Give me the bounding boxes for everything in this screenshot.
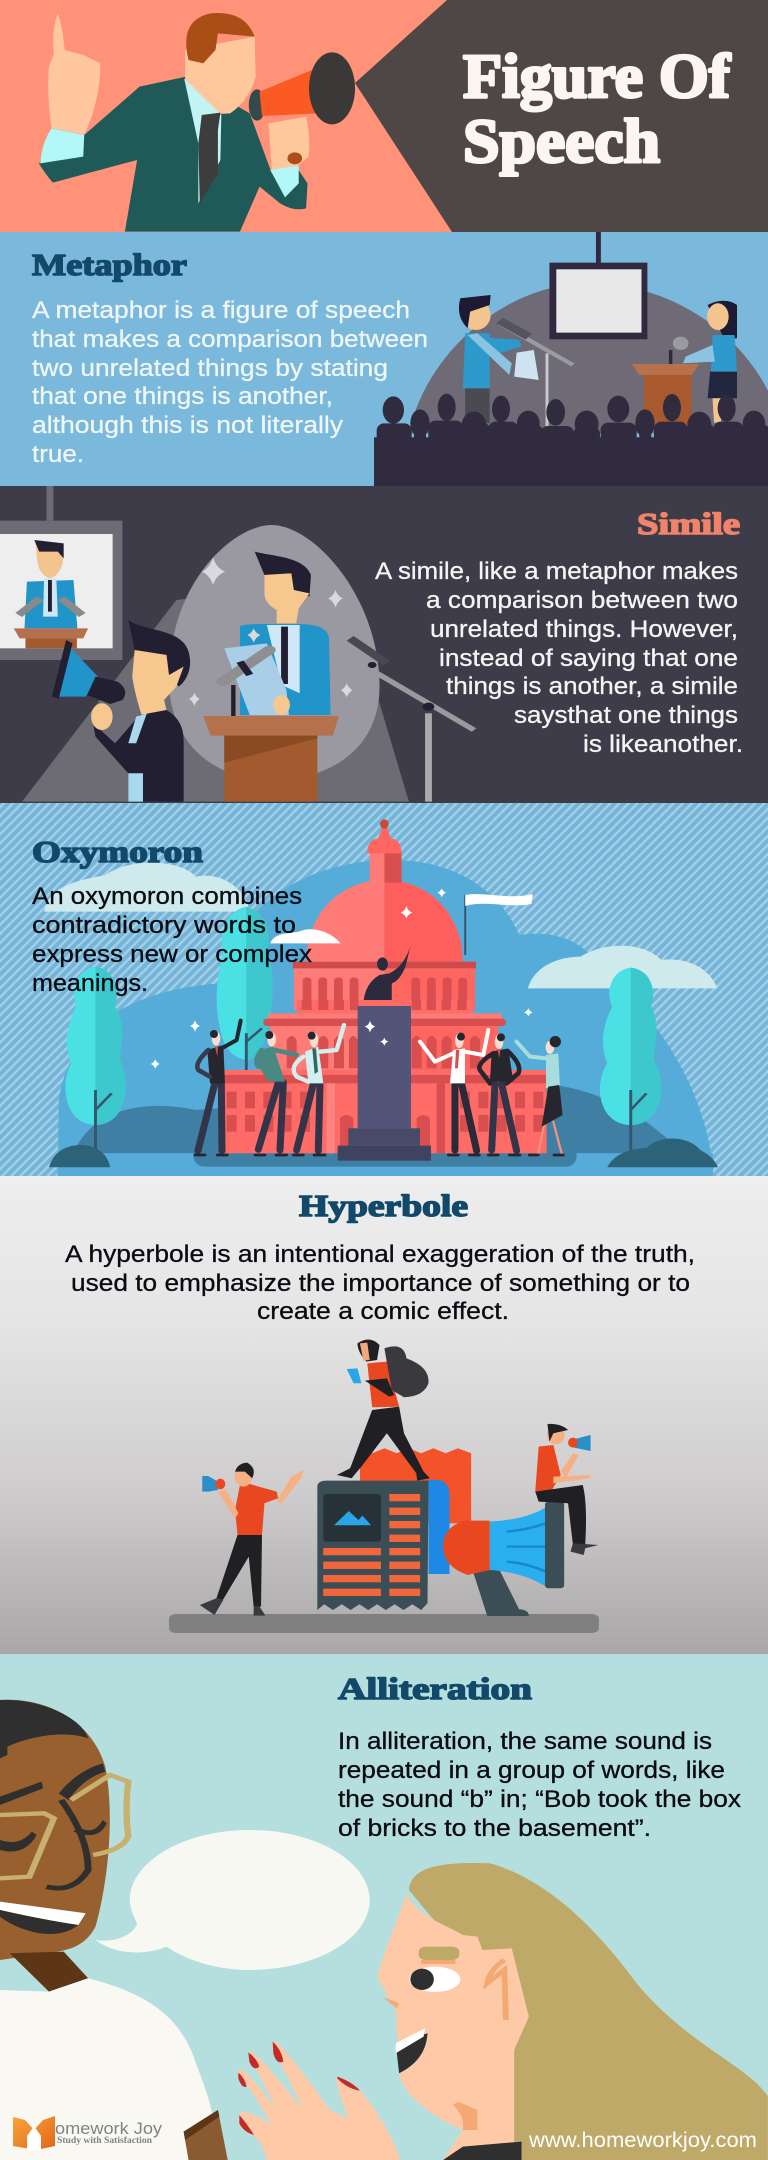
text: simile definition: things is another, a simile [446, 673, 738, 700]
text: metaphor definition: that one things is another, [32, 383, 333, 410]
panel: hyperbole [0, 1176, 768, 1654]
heading: Oxymoron: Oxymoron [32, 834, 203, 869]
text: metaphor definition [32, 297, 428, 468]
text: alliteration definition [338, 1728, 741, 1842]
illustration: conference stage [409, 232, 768, 433]
text: simile definition: unrelated things. However, [430, 616, 738, 643]
text: alliteration definition: repeated in a group of words, like [338, 1757, 725, 1784]
heading: Simile: Simile [637, 506, 740, 541]
logo: Homework Joy: omework Joy [55, 2119, 163, 2138]
text: hyperbole definition: create a comic effect. [257, 1298, 509, 1325]
audience silhouettes [374, 394, 768, 487]
panel: simile [0, 486, 768, 803]
person 3 [294, 1025, 344, 1151]
heading: Hyperbole: Hyperbole [299, 1188, 468, 1223]
text: oxymoron definition [32, 883, 312, 997]
icon: man shouting into megaphone [39, 13, 355, 232]
illustration: people with newspaper and megaphone [169, 1340, 599, 1633]
illustration: capitol dome, trees and clouds [44, 819, 718, 1177]
person 2 [256, 1031, 297, 1150]
title text [463, 43, 731, 176]
title text: Figure Of [463, 43, 731, 111]
text: metaphor definition: A metaphor is a figure of speech [32, 297, 410, 324]
title text: Speech [463, 108, 660, 176]
text: alliteration definition: of bricks to the basement”. [338, 1815, 651, 1842]
text: hyperbole definition: used to emphasize the importance of something or to [71, 1270, 690, 1297]
text: simile definition: a comparison between two [426, 587, 738, 614]
text: hyperbole definition [65, 1241, 695, 1325]
text: oxymoron definition: contradictory words to [32, 912, 296, 939]
icon: hand with red nails [238, 2042, 400, 2160]
heading: Alliteration: Alliteration [338, 1671, 532, 1706]
person 4 [420, 1030, 488, 1151]
text: metaphor definition: that makes a comparison between [32, 326, 428, 353]
text: metaphor definition: true. [32, 441, 84, 468]
shoes [195, 1151, 563, 1159]
panel: alliteration [0, 1654, 768, 2160]
text: simile definition: is likeanother. [583, 731, 743, 758]
text: metaphor definition: two unrelated things by stating [32, 355, 388, 382]
text: alliteration definition: In alliteration, the same sound is [338, 1728, 712, 1755]
illustration: two people talking [0, 1700, 768, 2160]
text: simile definition [375, 558, 743, 758]
text: simile definition: A simile, like a metaphor makes [375, 558, 738, 585]
panel: metaphor [0, 232, 768, 487]
person 1 [197, 1021, 241, 1151]
text: oxymoron definition: An oxymoron combines [32, 883, 302, 910]
heading: Metaphor: Metaphor [32, 247, 187, 282]
footer website url: www.homeworkjoy.com [528, 2129, 757, 2152]
illustration: capitol base, podium and crowd [190, 1000, 577, 1167]
text: simile definition: saysthat one things [514, 702, 738, 729]
text: alliteration definition: the sound “b” in; “Bob took the box [338, 1786, 741, 1813]
logo: Homework Joy [13, 2116, 163, 2150]
text: metaphor definition: although this is not literally [32, 412, 343, 439]
text: oxymoron definition: meanings. [32, 970, 148, 997]
panel: oxymoron [0, 803, 768, 1177]
logo: Homework Joy: Study with Satisfaction [57, 2135, 152, 2145]
illustration: speaker at lectern [0, 486, 474, 802]
person 5 [479, 1033, 519, 1151]
panel: title banner [0, 0, 768, 232]
text: oxymoron definition: express new or complex [32, 941, 312, 968]
text: simile definition: instead of saying that one [439, 645, 738, 672]
text: hyperbole definition: A hyperbole is an intentional exaggeration of the truth, [65, 1241, 695, 1268]
person 6 [517, 1036, 563, 1153]
dark title wedge [355, 0, 768, 232]
